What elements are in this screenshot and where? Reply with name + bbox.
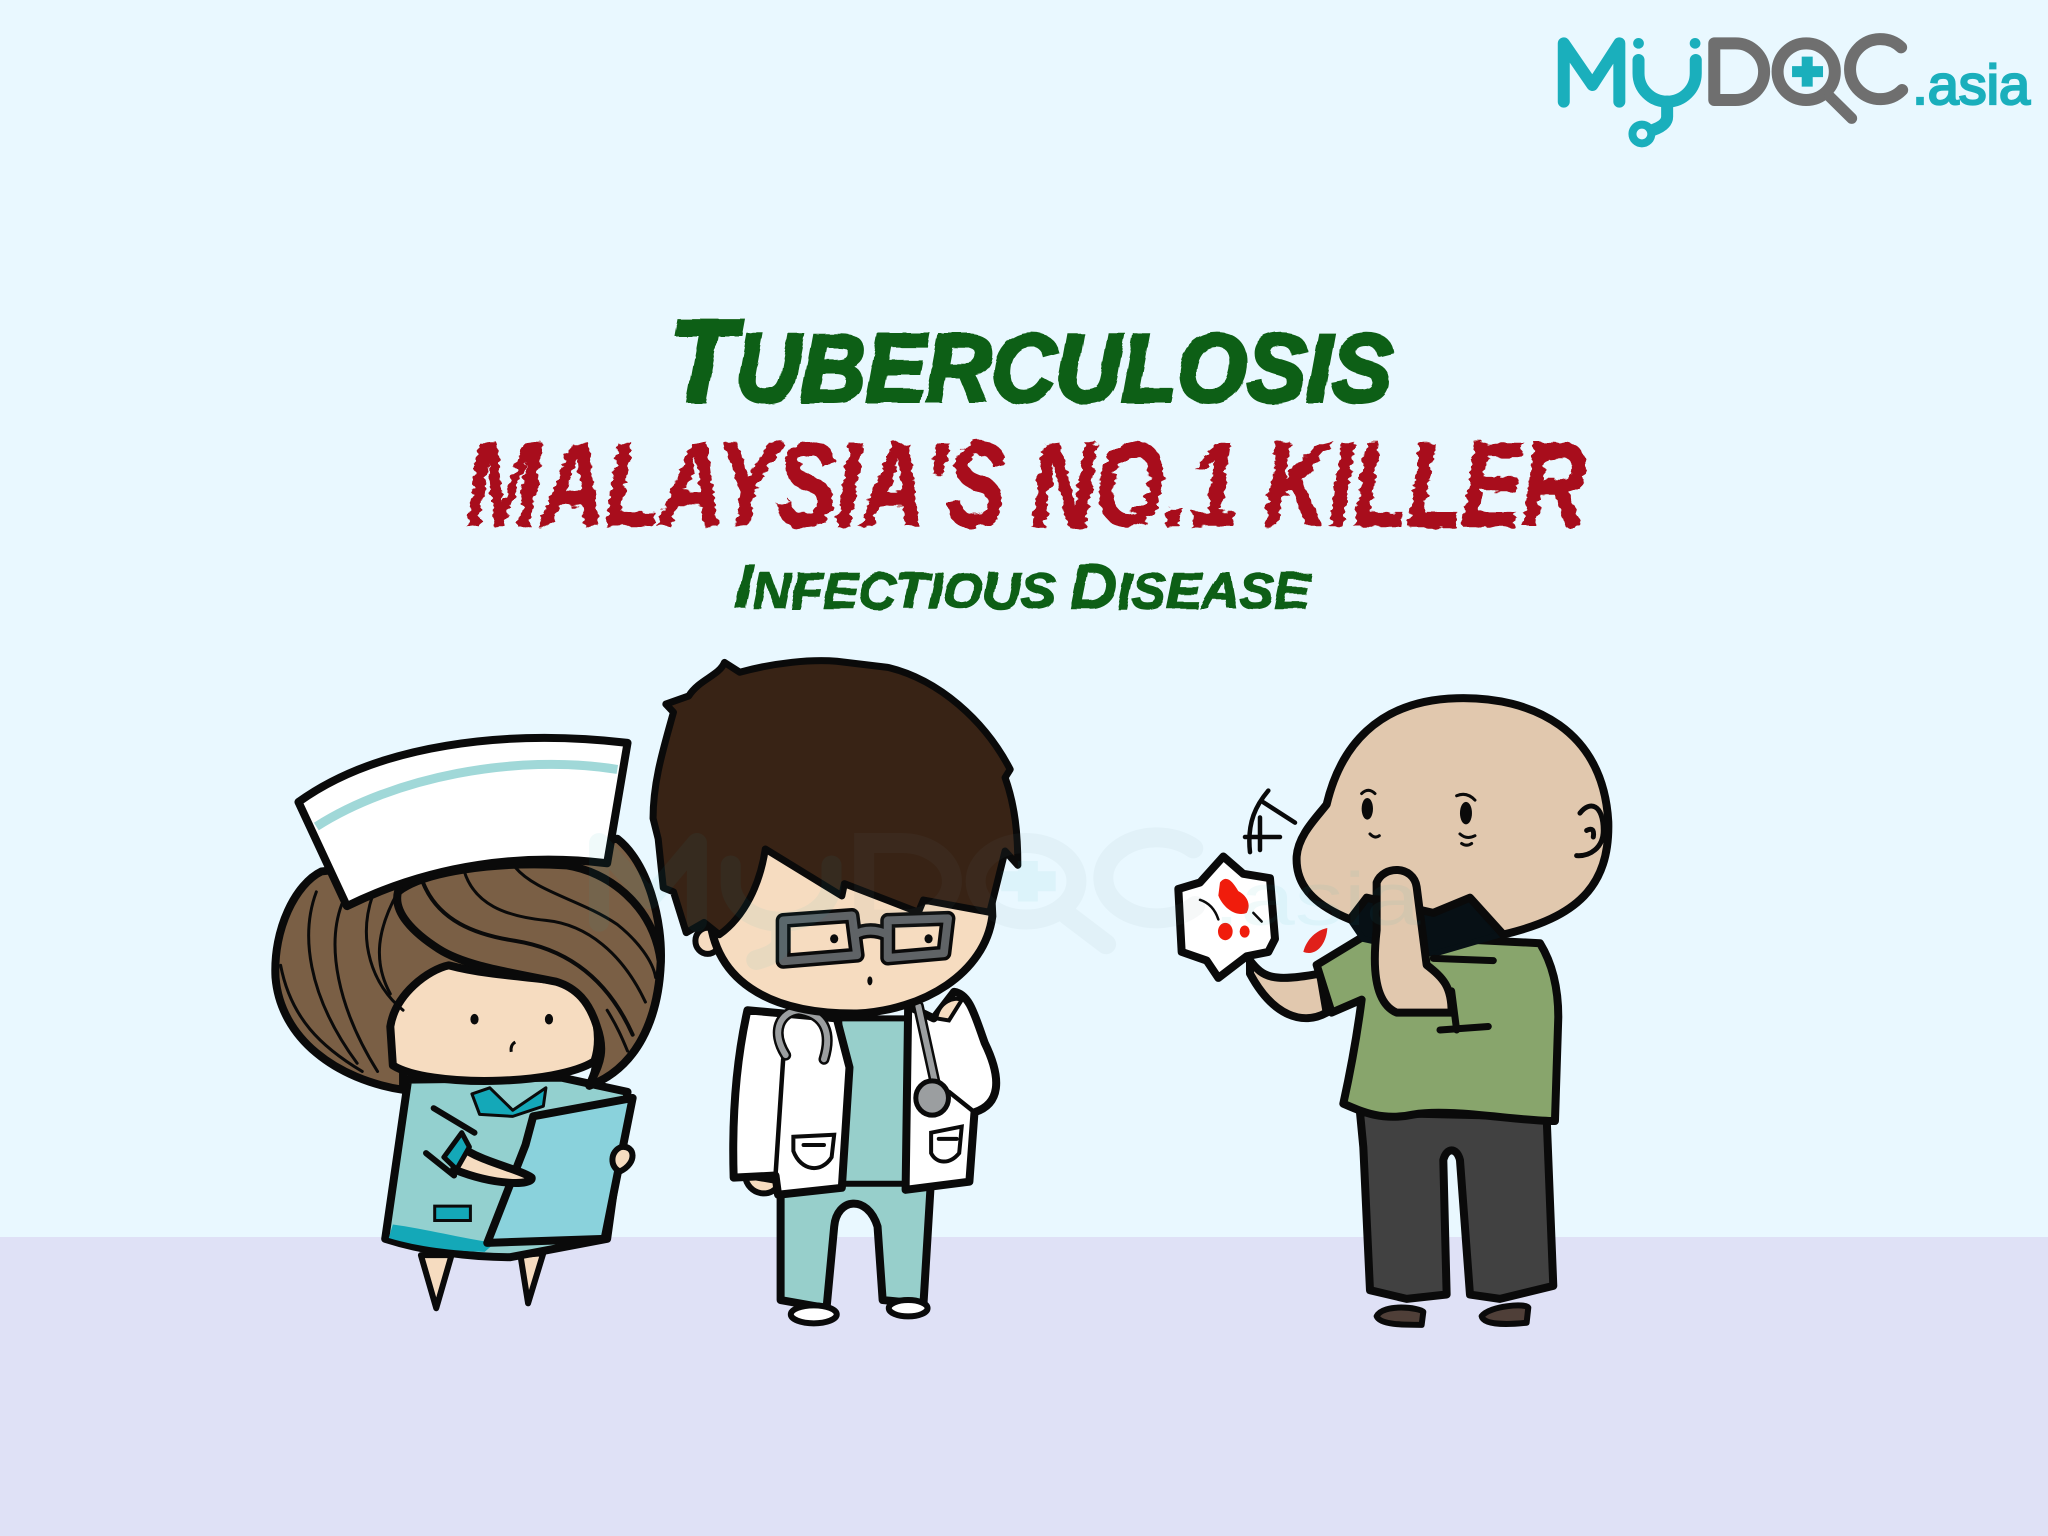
doctor face [709, 822, 992, 1014]
doctor sleeve seams [776, 1059, 974, 1176]
watermark text .asia: .asia [1213, 857, 1421, 941]
character: doctor [653, 661, 1018, 1323]
title: Tuberculosis: TUBERCULOSIS [669, 296, 1392, 426]
watermark M and y [599, 843, 832, 960]
doctor hand [745, 1176, 781, 1193]
doctor ear [695, 928, 720, 954]
bloody tissue [1178, 856, 1275, 978]
doctor glasses [783, 916, 948, 961]
man trousers [1360, 1112, 1553, 1299]
logo letter y stethoscope [1632, 40, 1698, 143]
watermark D O C [864, 837, 1195, 944]
man face lines [1362, 790, 1475, 845]
nurse eyes and nose [470, 1014, 553, 1052]
uniform collar [472, 1088, 546, 1116]
doctor scrub top [839, 1018, 908, 1184]
doctor coat right [906, 992, 996, 1190]
doctor coat left [733, 1010, 849, 1195]
man raised arm [1375, 870, 1452, 1013]
logo letter C [1850, 39, 1902, 99]
subtitle: Infectious Disease: INFECTIOUS DISEASE [735, 553, 1311, 622]
doctor pockets [793, 1127, 962, 1168]
watermark plus [1001, 861, 1056, 902]
stethoscope chest piece [916, 1081, 948, 1115]
hair front sweep [397, 864, 661, 1086]
doctor hair [653, 661, 1018, 935]
blood droplet [1303, 928, 1327, 953]
man shirt [1317, 935, 1558, 1121]
man extended arm [1250, 961, 1327, 1018]
doctor eyes and mouth [830, 934, 933, 985]
cough lines [1245, 791, 1295, 852]
nurse folder [487, 1098, 633, 1243]
watermark logo [599, 837, 1421, 960]
man sleeve lines [1433, 958, 1493, 1030]
nurse hand on folder [612, 1147, 633, 1171]
character: coughing man [1178, 698, 1608, 1325]
logo: MyDOC.asia [1564, 39, 2031, 143]
logo letter M [1564, 43, 1619, 102]
logo text .asia: .asia [1912, 53, 2031, 116]
man shoes [1377, 1305, 1528, 1325]
title: Malaysia's No.1 Killer: MALAYSIA'S NO.1 KILLER [466, 418, 1586, 552]
man head [1297, 698, 1608, 935]
logo letter D [1714, 43, 1764, 100]
uniform hem [389, 1225, 495, 1252]
nurse uniform [385, 1078, 628, 1257]
uniform pocket [435, 1206, 470, 1220]
doctor pants [781, 1178, 931, 1308]
man eyes [1362, 798, 1472, 824]
doctor shoes [791, 1300, 928, 1323]
doctor stethoscope [778, 1006, 936, 1088]
man beard [1350, 898, 1500, 954]
nurse legs [421, 1253, 543, 1308]
logo magnifier O with plus [1778, 43, 1852, 118]
doctor raised shoulder skin [936, 999, 962, 1020]
tissue creases [1200, 900, 1262, 922]
stethoscope tubing gray [778, 1006, 936, 1088]
blood stains [1218, 879, 1250, 940]
man ear [1577, 806, 1603, 856]
character: nurse [275, 738, 661, 1308]
hair back [275, 839, 661, 1090]
background: floor [0, 1237, 2048, 1536]
nurse cap [298, 738, 628, 906]
nurse writing arm [426, 1108, 532, 1183]
nurse cap stripe [316, 764, 617, 827]
hair strands [281, 867, 656, 1071]
nurse face [390, 965, 598, 1081]
